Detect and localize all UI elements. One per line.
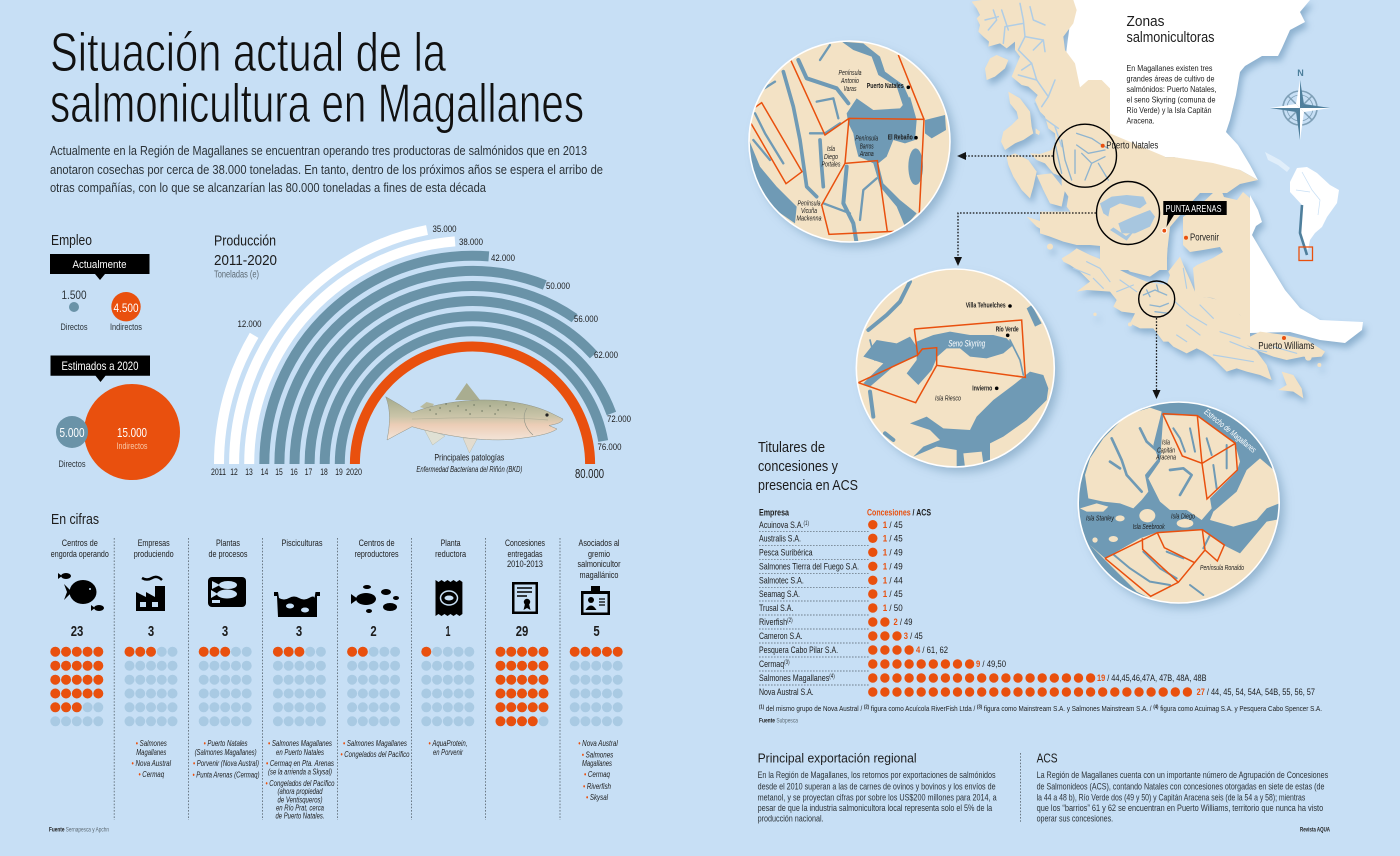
bubble: 4.500 indirectos: 4.500 [114,301,139,315]
table rows: 2 / 49 [894,617,912,628]
list: pisciculturas: de Puerto Natales. [276,812,324,820]
column: empresas produciendo [130,538,174,779]
detail map: puerto natales [740,41,955,247]
column: asociados al gremio: 5 [593,623,600,640]
source: Fuente Sernapesca y Apchn [49,826,109,834]
table rows: (3) [784,660,790,666]
list: pisciculturas: • Salmones Magallanes [268,739,332,748]
labels: natales: Diego [824,154,838,161]
column: centros de reproductores: Centros de [359,538,395,549]
text block: principal exportacion: Principal exportación regional [758,751,917,766]
labels: skyring: Villa Tehuelches [966,302,1006,310]
footnote: figura como Mainstream S.A. y Salmones Mainstream S.A. / [982,704,1153,713]
heading: empleo: Empleo [51,232,92,249]
text block: principal exportacion: pesar de que la industria salmonicultora local representa solo el 5% de la [758,803,993,814]
heading: titulares: concesiones y [758,458,838,475]
bubble: 15.000 indirectos: Indirectos [116,441,148,451]
column: planta reductora: reductora [435,549,467,560]
column: plantas de procesos: 3 [222,623,228,640]
column: concesiones entregadas: 29 [516,623,528,640]
label: puerto natales: Puerto Natales [1106,140,1158,152]
list: planta [428,739,468,757]
list: pisciculturas: • Cermaq en Pta. Arenas [266,759,334,768]
column: concesiones entregadas: entregadas [508,549,543,560]
list: empresas: • Cermaq [138,770,165,779]
list: pisciculturas [266,739,335,820]
list: planta: en Porvenir [433,748,463,757]
label box: estimados a 2020 [50,356,150,382]
text block: principal exportacion: producción nacional. [758,814,824,824]
table rows: Trusal S.A. [759,603,793,614]
text block: acs: la 44 a 48 b), Río Verde dos (49 y 50) y Capitán Aracena seis (de la 54 a y 58); mientras [1037,792,1305,803]
column: centros de engorda: 23 [71,623,83,640]
panel: produccion chart [211,224,631,481]
heading: titulares: presencia en ACS [758,477,858,494]
map: patagonia [954,0,1366,403]
value labels: 50.000 [546,281,570,291]
label: punta arenas [1162,201,1227,233]
bubble: 1.500 directos: 1.500 [62,288,87,302]
year labels: 17 [305,467,312,477]
footnote: (3) [977,704,982,710]
column: empresas produciendo: 3 [148,623,154,640]
table rows: (4) [829,674,835,680]
table rows: Pesca Suribérica [759,548,813,558]
labels: natales: Mackenna [796,216,822,222]
intro text: anotaron cosechas por cerca de 38.000 toneladas. En tanto, dentro de los próximos años se espera el arribo de [50,163,603,177]
icon: feed bag [436,580,462,616]
footnote: (4) [1153,704,1159,710]
icon: compass rose [1270,68,1330,140]
panel: titulares de concesiones [758,439,1322,725]
table rows: 1 / 49 [883,548,903,558]
bubble: 4.500 indirectos: Indirectos [110,322,142,332]
list: asociados: Magallanes [582,759,612,768]
heading: titulares: Titulares de [758,439,825,456]
intro text [50,144,603,195]
year labels: 13 [245,467,253,477]
icon: certificate [512,582,538,614]
table rows: 4 / 61, 62 [916,645,948,656]
value labels: 62.000 [594,350,618,360]
column: asociados al gremio: Asociados al [578,538,620,549]
heading: produccion [214,232,277,280]
intro text: Actualmente en la Región de Magallanes se encuentran operando tres productoras de salmónidos que en 2013 [50,144,587,158]
column: concesiones entregadas: Concesiones [505,538,545,549]
bubble: 5.000 directos: Directos [58,459,86,469]
text block: acs: operar sus concesiones. [1037,814,1113,824]
caption: patologias [416,452,523,474]
heading: produccion: Toneladas (e) [214,270,259,280]
labels: aracena: Isla Seebrook [1133,524,1165,531]
heading: titulares [758,439,858,494]
list: pisciculturas: (ahora propiedad [278,787,323,796]
text block: principal exportacion: metanol, y se proyectan cifras por sobre los US$200 millones para 2014, a [758,792,997,803]
label: porvenir [1184,232,1220,244]
labels: natales: Antonio [840,78,859,85]
zone circle: isla capitan aracena [1139,281,1175,317]
table rows: 27 / 44, 45, 54, 54A, 54B, 55, 56, 57 [1197,687,1315,698]
detail map: isla capitan aracena [1078,402,1284,608]
column: concesiones entregadas [500,538,545,721]
table rows: Salmones Magallanes [759,673,852,684]
zone circle: skyring [1096,182,1160,244]
label box: estimados a 2020: Estimados a 2020 [62,359,139,373]
text block: principal exportacion [758,751,997,824]
northern fjords [985,3,1062,147]
table rows: (2) [787,618,793,624]
list: pisciculturas: en Río Prat, cerca [276,804,324,812]
arc chart [219,230,611,464]
caption: patologias: Enfermedad Bacteriana del Riñón (BKD) [416,465,523,474]
label box: actualmente [50,254,150,280]
labels: skyring [935,302,1019,402]
list: empresas: Magallanes [136,748,166,757]
text: zonas salmonicultoras: salmonicultoras [1126,29,1214,46]
heading: produccion: 2011-2020 [214,252,277,269]
labels: natales: Portales [822,162,841,168]
labels: natales: Puerto Natales [867,83,904,90]
value labels: 12.000 [238,319,262,329]
year labels: 12 [230,467,238,477]
list: pisciculturas: de Ventisqueros) [278,796,323,804]
column: planta reductora: 1 [446,623,450,640]
labels: aracena: Estrecho de Magallanes [1202,407,1259,455]
list: pisciculturas: (se la arrienda a Skysal) [268,768,332,776]
lake skyring on map [1100,195,1155,241]
title [50,21,584,134]
bubble: 15.000 indirectos [84,384,180,480]
table rows: 1 / 45 [883,520,903,531]
list: reproductores: • Congelados del Pacífico [340,750,410,759]
icon: fish box [208,577,246,607]
labels: aracena: Isla Stanley [1086,516,1114,522]
footnote: figura como Acuícola RiverFish Ltda / [869,704,977,713]
bubble: 15.000 indirectos: 15.000 [117,426,147,440]
bubble: 4.500 indirectos [110,292,142,332]
zone circle: puerto natales [1054,124,1116,187]
labels: natales: Península [855,136,878,142]
arrow: aracena to detail [1152,318,1160,399]
column: asociados al gremio: gremio [588,549,610,560]
list: asociados: • Cermaq [584,770,610,779]
value labels: 76.000 [598,442,622,452]
label box: actualmente: Actualmente [72,259,126,271]
table rows: Seamag S.A. [759,589,800,600]
column: centros de engorda: Centros de [62,538,98,549]
column: centros de reproductores [340,538,410,759]
credit: Revista AQUA [1300,828,1330,834]
illustration: salmon [386,383,563,453]
footnote: (1) [759,704,764,710]
bubble: 5.000 directos [56,416,88,469]
text block: principal exportacion: desde el 2010 superan a las de carnes de ovinos y bovinos y los envíos de [758,782,996,793]
labels: natales: Península [838,70,862,77]
footnote: del mismo grupo de Nova Austral / [764,704,864,713]
text: zonas salmonicultoras [1126,13,1216,126]
table rows: Australis S.A. [759,534,801,544]
list: empresas: • Salmones [136,739,167,748]
label: puerto williams: Puerto Williams [1258,341,1314,352]
list: reproductores: • Salmones Magallanes [343,739,407,748]
labels: natales: Península [798,200,821,208]
southern fjords [1073,262,1297,362]
text: zonas salmonicultoras: salmónidos: Puerto Natales, [1126,84,1216,94]
title: salmonicultura en Magallanes [50,72,584,134]
list: plantas: (Salmones Magallanes) [195,748,257,757]
labels: aracena: Península Ronaldo [1200,565,1244,572]
list: plantas: • Punta Arenas (Cermaq) [192,770,260,780]
bubble: 5.000 directos: 5.000 [60,426,85,440]
table rows: (1) [804,521,809,527]
list: reproductores [340,739,410,759]
list: asociados: • Skysal [586,793,608,802]
labels: skyring: Isla Riesco [935,396,961,402]
list: asociados [578,739,618,802]
table rows: 1 / 50 [883,603,903,614]
icon: factory [136,577,165,611]
labels: natales: Varas [844,86,857,93]
table rows: Salmones Tierra del Fuego S.A. [759,562,859,572]
list: planta: • AquaProtein, [428,739,468,748]
column: empresas produciendo: produciendo [134,549,174,560]
table header: Empresa [759,507,790,518]
bubble: 1.500 directos [60,288,88,332]
list: empresas [132,739,171,779]
table rows: 1 / 49 [883,562,903,572]
list: pisciculturas: • Congelados del Pacífico [266,779,335,788]
table rows: 19 / 44,45,46,47A, 47B, 48A, 48B [1097,673,1206,684]
heading: en cifras: En cifras [51,511,99,528]
icon: id badge [581,586,610,615]
text: zonas salmonicultoras: el seno Skyring (comuna de [1126,94,1216,104]
year labels: 2011 [211,467,226,477]
icon: fish tank [274,592,320,617]
column: asociados al gremio: magallánico [580,570,618,581]
bubble: 1.500 directos: Directos [60,322,88,332]
list: plantas [192,739,260,780]
table rows: Salmotec S.A. [759,576,804,586]
table header [759,507,931,518]
text: zonas salmonicultoras: Río Verde) y la Isla Capitán [1126,105,1212,115]
table rows: 1 / 44 [883,576,903,586]
arrow: skyring to detail [954,213,1096,266]
year labels: 2020 [346,467,362,477]
table rows: 3 / 45 [904,631,923,642]
arrow: natales to detail [957,152,1053,160]
labels: aracena [1086,407,1259,572]
column: planta reductora: Planta [441,538,461,549]
list: pisciculturas: en Puerto Natales [276,748,324,757]
value labels: 38.000 [459,237,483,247]
labels: aracena: Isla Diego [1171,514,1195,520]
table rows: Cameron S.A. [759,631,803,642]
labels: natales: Vicuña [801,208,817,215]
value labels [238,224,631,452]
column: pisciculturas: 3 [296,623,302,640]
intro text: otras compañías, con lo que se alcanzarían las 80.000 toneladas a fines de esta década [50,181,486,195]
table rows: Pesquera Cabo Pilar S.A. [759,645,838,656]
column: plantas de procesos [192,538,260,780]
table rows: Cermaq [759,659,793,670]
year labels: 18 [320,467,328,477]
labels: natales: Isla [827,146,835,153]
table rows: 1 / 45 [883,589,903,600]
labels: skyring: Río Verde [996,326,1019,334]
icon: compass rose: N [1297,68,1304,78]
labels: natales: Arana [859,151,874,158]
column: centros de engorda: engorda operando [51,549,109,560]
column: concesiones entregadas: 2010-2013 [507,559,543,570]
value labels: 56.000 [574,314,598,324]
table rows: 1 / 45 [883,534,903,544]
icon: school of fish [351,585,399,613]
list: plantas: • Porvenir (Nova Austral) [193,759,259,768]
table rows: Acuinova S.A. [759,520,819,531]
year labels [211,467,362,477]
source: subpesca: Fuente Subpesca [759,718,798,725]
year labels: 19 [335,467,343,477]
column: plantas de procesos: de procesos [208,549,248,560]
table rows: 9 / 49,50 [976,659,1006,670]
column: centros de reproductores: reproductores [355,549,399,560]
labels: aracena: Aracena [1155,454,1176,462]
panel: empleo [50,232,180,480]
text block: acs: ACS [1037,751,1058,766]
text: zonas salmonicultoras: grandes áreas de cultivo de [1126,74,1215,84]
text: zonas salmonicultoras: Aracena. [1126,116,1154,126]
list: asociados: • Riverfish [583,782,611,791]
list: plantas: • Puerto Natales [204,739,248,748]
text: zonas salmonicultoras: Zonas [1126,13,1164,30]
labels: skyring: Seno Skyring [948,339,986,350]
column: asociados al gremio: salmonicultor [578,559,620,570]
column: empresas produciendo: Empresas [138,538,170,549]
column: centros de reproductores: 2 [370,623,377,640]
icon: fish [58,573,104,611]
inset: south america locator [1265,152,1339,260]
table rows: Riverfish [759,617,796,628]
table header: Concesiones / ACS [867,507,931,518]
table rows [759,520,1315,698]
label: punta arenas: PUNTA ARENAS [1166,204,1222,215]
list: asociados: • Salmones [582,750,613,760]
detail map: seno skyring [856,269,1059,472]
column: asociados al gremio [49,538,620,834]
labels: aracena: Capitán [1157,448,1175,454]
column: centros de engorda [51,538,109,721]
column: pisciculturas: Pisciculturas [282,538,323,549]
value 80.000: 80.000 [575,466,604,481]
year labels: 15 [275,467,283,477]
labels: natales: El Rebaño [888,134,913,142]
text block: principal exportacion: En la Región de Magallanes, los retornos por exportaciones de salmónidos [758,770,996,781]
column: pisciculturas [266,538,335,820]
value labels: 42.000 [491,253,515,263]
labels: aracena: Isla [1162,440,1170,446]
value labels: 72.000 [607,414,631,424]
labels: skyring: Invierno [972,386,992,392]
text: zonas salmonicultoras: En Magallanes existen tres [1126,63,1212,73]
list: empresas: • Nova Austral [132,759,171,768]
year labels: 16 [290,467,298,477]
text block: acs: que los “barrios” 61 y 62 se encuentran en Puerto Williams, territorio que nunca ha visto [1037,803,1323,814]
caption: patologias: Principales patologías [434,452,505,464]
heading: produccion: Producción [214,232,276,250]
year labels: 14 [261,467,268,477]
column: planta reductora [421,538,469,757]
label: puerto williams [1258,336,1314,352]
column: plantas de procesos: Plantas [216,538,240,549]
labels: natales: Barros [860,144,874,150]
table rows: Nova Austral S.A. [759,687,814,698]
value labels: 35.000 [432,224,456,234]
title: Situación actual de la [50,21,446,83]
text block: acs [1037,751,1328,824]
label: porvenir: Porvenir [1190,232,1220,244]
footnote: figura como Acuimag S.A. y Pesquera Cabo Spencer S.A. [1158,704,1322,713]
list: asociados: • Nova Austral [578,739,618,748]
footnote: (2) [864,704,869,710]
labels: natales [796,70,918,222]
